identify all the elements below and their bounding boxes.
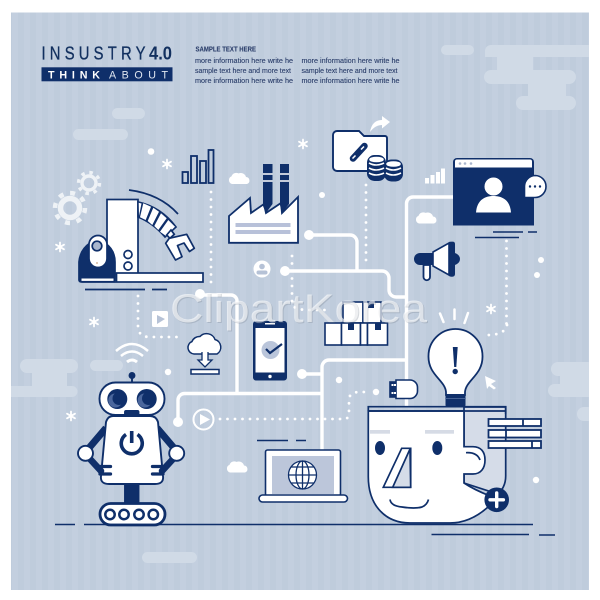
icon: cloud near megaphone	[416, 212, 436, 224]
icon: folder with coins	[333, 116, 402, 181]
robot head	[100, 382, 164, 416]
watermark: ClipartKorea	[170, 287, 428, 331]
face	[368, 411, 490, 523]
icon: plus badge	[484, 488, 509, 512]
sample text block: more information here write he	[195, 76, 293, 85]
icon: wifi	[116, 344, 148, 362]
icon: play box	[152, 311, 168, 327]
robot lower arms	[90, 459, 173, 474]
icon: cloud near laptop	[227, 461, 247, 472]
icon: gears	[55, 172, 100, 223]
icon: robot arm machine	[79, 190, 203, 290]
subtitle bar: think about	[42, 67, 172, 82]
laptop	[257, 440, 348, 502]
bar chart	[182, 150, 214, 183]
eyes	[375, 441, 442, 455]
icon: megaphone	[414, 242, 460, 280]
title: 4.0	[149, 44, 172, 64]
ground lines	[55, 524, 555, 535]
eyebrows	[370, 430, 454, 434]
subtitle bar: think about: ABOUT	[109, 70, 168, 82]
sample text block: sample text here and more text	[302, 66, 398, 75]
subtitle bar: think about: THINK	[48, 70, 100, 82]
title: INSUSTRY	[42, 43, 146, 64]
sample text block: sample text here and more text	[195, 66, 291, 75]
icon: cursor arrow	[485, 376, 496, 390]
icon: USB drive	[390, 380, 418, 398]
icon: cloud small	[229, 173, 249, 184]
panel: video call window	[453, 158, 546, 238]
ear detail	[466, 453, 480, 460]
icon: stacked boxes	[325, 302, 388, 345]
head with open top	[368, 407, 506, 523]
watermark: ClipartKorea	[171, 288, 429, 332]
sample text block: more information here write he	[302, 76, 400, 85]
back of head	[464, 407, 506, 494]
icon: brick wall	[488, 419, 541, 448]
lightbulb	[428, 310, 483, 406]
robot stem	[125, 484, 138, 504]
robot upper arms	[89, 428, 174, 448]
sample text block: more information here write he	[195, 56, 293, 65]
robot body	[101, 416, 163, 484]
icon: globe	[288, 461, 316, 489]
robot track	[100, 504, 165, 525]
robot eyes	[107, 389, 157, 409]
icon: smartphone with check	[253, 321, 287, 380]
robot antenna	[130, 373, 134, 383]
head top rim	[368, 407, 506, 414]
sample text block	[195, 44, 400, 85]
small dots and sparkles	[56, 140, 544, 483]
sample text block: more information here write he	[302, 56, 400, 65]
connector lines	[173, 197, 453, 450]
icon: play circle	[194, 410, 214, 430]
icon: power button	[121, 431, 142, 454]
robot	[78, 373, 184, 525]
icon: factory	[229, 164, 298, 243]
robot hands	[78, 446, 184, 461]
icon: user badge	[254, 260, 270, 278]
icon: signal bars	[425, 168, 445, 184]
nose	[383, 448, 411, 487]
dotted connectors	[138, 185, 507, 419]
sample text block: SAMPLE TEXT HERE	[196, 44, 256, 53]
icon: cloud download	[188, 334, 221, 374]
smile	[390, 500, 428, 508]
